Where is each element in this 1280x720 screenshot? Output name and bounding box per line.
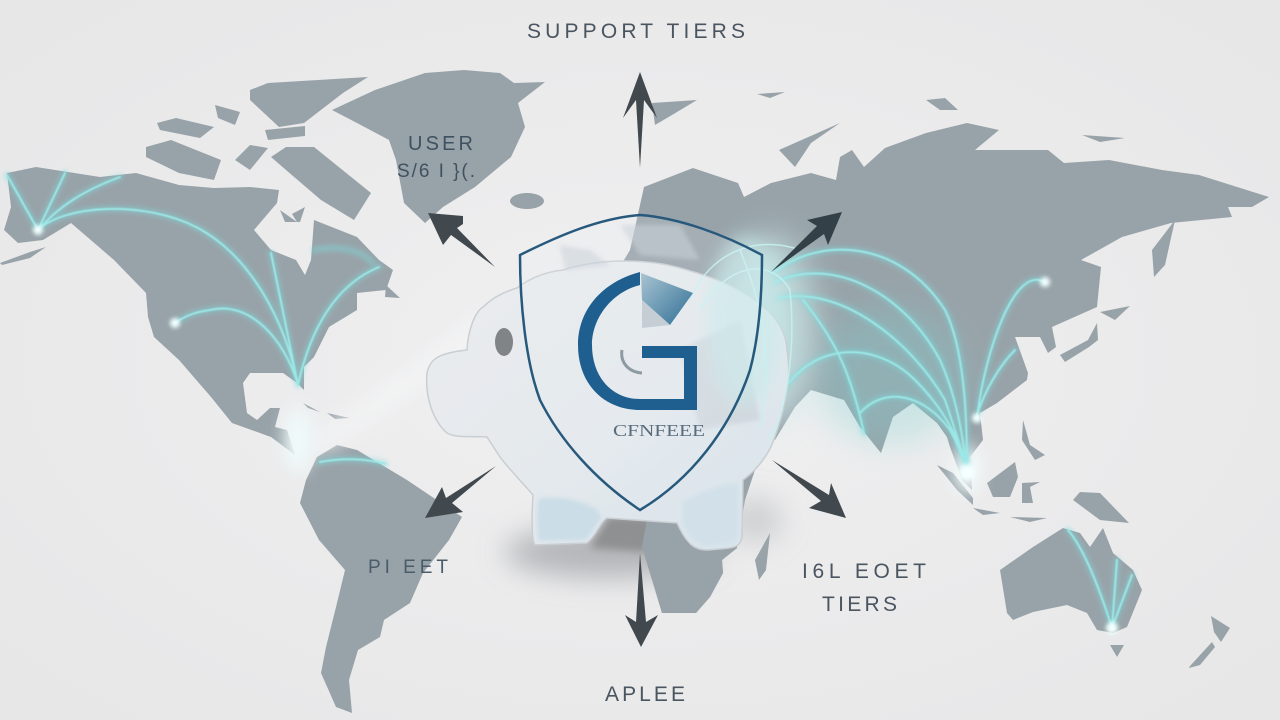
map: Iceland xyxy=(510,193,544,209)
gem facet xyxy=(641,273,693,325)
arrow: up xyxy=(623,72,657,168)
network arcs: core xyxy=(7,173,1132,628)
map: Australia xyxy=(1000,528,1142,633)
logo caption: CFNFEEE xyxy=(613,421,705,440)
glowing haze beside the shield xyxy=(725,235,815,425)
label: right tier: I6L EOET xyxy=(802,560,926,583)
map: Africa xyxy=(560,360,765,613)
front foot shade xyxy=(537,497,602,541)
map: Greenland xyxy=(332,70,545,223)
logo: G mark xyxy=(578,272,697,410)
label: user: USER xyxy=(408,133,473,155)
Africa seen between feet xyxy=(642,519,737,613)
G letter xyxy=(578,272,697,410)
arrow: upper right xyxy=(771,212,842,272)
pig eye xyxy=(495,328,513,356)
glow at Central America xyxy=(284,408,312,472)
label: tiers: TIERS xyxy=(822,593,897,616)
pig body xyxy=(427,261,789,550)
shield outline xyxy=(520,215,762,510)
arrow: lower left xyxy=(425,466,496,518)
label: left tier: PI EET xyxy=(368,557,448,578)
map: Southeast Asia islands xyxy=(937,462,1129,523)
piggy bank soft shadow xyxy=(505,498,783,578)
label: garbled second line: S/6 I }(. xyxy=(397,161,475,182)
arrow: lower right xyxy=(772,460,846,518)
piggy bank xyxy=(427,225,800,550)
shadow between feet xyxy=(590,516,660,552)
map: Tasmania xyxy=(1110,645,1124,657)
teal glow arcs over pig xyxy=(690,244,800,440)
label: support tiers: SUPPORT TIERS xyxy=(527,20,745,43)
pale beam from Central America xyxy=(305,310,510,455)
pale map patches on pig xyxy=(560,225,760,430)
label: bottom: APLEE xyxy=(605,683,685,706)
network nodes xyxy=(33,225,1118,634)
teal tint on pig flank xyxy=(707,235,783,405)
map: Asian and Arctic islands xyxy=(652,92,1175,580)
map: Eurasia xyxy=(600,123,1269,490)
gem lower shade xyxy=(642,300,670,328)
network arcs: glow xyxy=(7,173,1132,628)
rear foot shade xyxy=(682,484,739,546)
arrow: upper left xyxy=(428,213,495,267)
arrow: down xyxy=(625,553,658,647)
map: New Zealand xyxy=(1189,616,1230,668)
teal tint over South Asia xyxy=(815,305,965,445)
map: South America xyxy=(300,445,462,713)
map: North America xyxy=(0,77,400,455)
glow at Southeast Asia xyxy=(954,446,980,494)
inner swirl xyxy=(622,350,642,373)
